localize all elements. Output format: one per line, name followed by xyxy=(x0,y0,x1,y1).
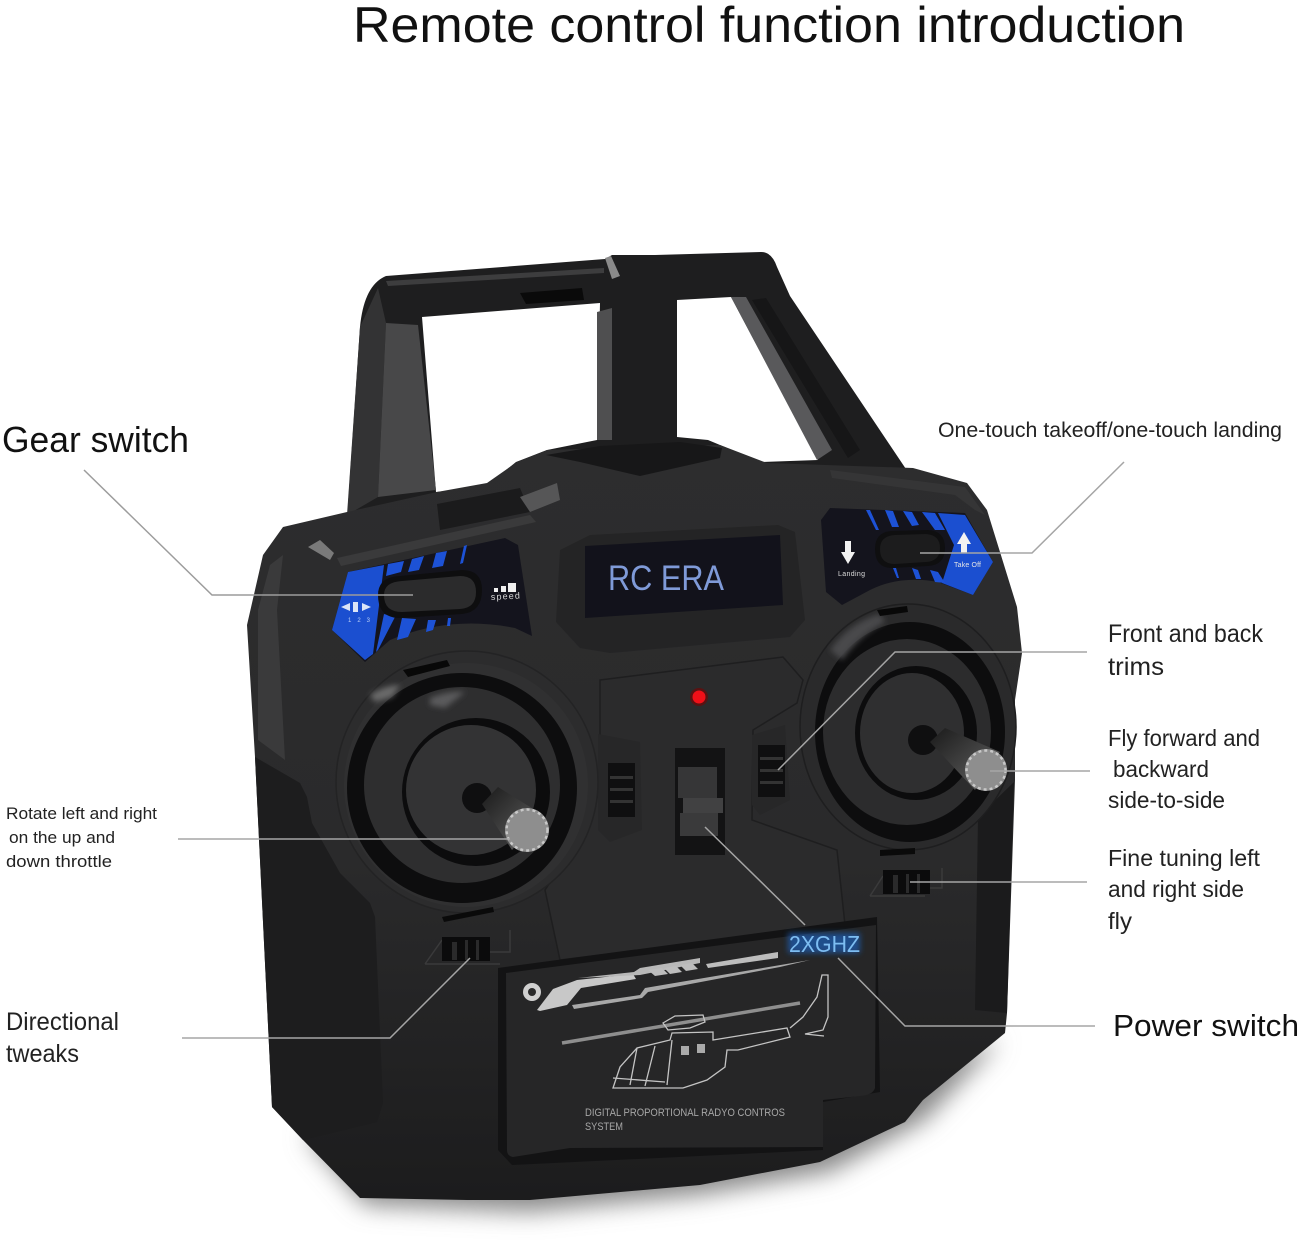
label: directional tweaks: tweaks xyxy=(6,1040,79,1068)
label: fine tuning xyxy=(1108,845,1261,934)
line: trims xyxy=(778,652,1087,770)
label: front and back trims: Front and back xyxy=(1108,620,1263,648)
right joystick xyxy=(800,604,1016,856)
ground shadow xyxy=(305,1040,1000,1212)
line: directional xyxy=(182,958,470,1038)
red power LED xyxy=(690,688,708,706)
right trim slider xyxy=(752,725,790,815)
left blue speed panel: 1 2 3 xyxy=(348,618,371,624)
left blue speed panel: speed xyxy=(491,590,520,602)
display screen xyxy=(556,525,805,653)
line: fly forward xyxy=(990,770,1090,772)
stick base xyxy=(908,725,938,755)
battery logo xyxy=(523,952,810,1011)
label: rotate throttle: Rotate left and right xyxy=(6,804,157,823)
label: power switch: Power switch xyxy=(1113,1008,1299,1043)
icon: gear indicators xyxy=(341,602,371,612)
stick base xyxy=(462,783,492,813)
shoulder facets xyxy=(308,470,985,566)
right blue takeoff panel: Landing xyxy=(838,571,865,578)
cover text: DIGITAL PROPORTIONAL RADYO CONTROS xyxy=(585,1107,785,1119)
line: fine tuning xyxy=(910,881,1087,883)
lower left trim xyxy=(425,930,510,964)
remote controller xyxy=(247,252,1022,1212)
left trim slider xyxy=(598,734,642,842)
left grip xyxy=(255,757,383,1140)
label: directional tweaks: Directional xyxy=(6,1008,119,1036)
right grip xyxy=(975,782,1014,1013)
cover text: SYSTEM xyxy=(585,1121,623,1133)
display text: RC ERA xyxy=(608,559,725,598)
stick knob xyxy=(505,808,549,852)
left joystick xyxy=(336,651,598,922)
label: rotate throttle xyxy=(6,804,157,871)
label: fly forward: side-to-side xyxy=(1108,787,1225,813)
label: rotate throttle: on the up and xyxy=(9,828,115,847)
frequency label: 2XGHZ xyxy=(789,931,860,957)
label: fine tuning: fly xyxy=(1108,908,1133,934)
line: gear switch xyxy=(84,470,413,595)
main body xyxy=(247,445,1022,1200)
battery cover xyxy=(498,917,880,1165)
helicopter line drawing xyxy=(562,975,828,1088)
handle clip xyxy=(546,442,722,476)
left blue speed panel xyxy=(332,538,532,662)
label: front and back trims xyxy=(1108,620,1263,681)
centre power switch xyxy=(675,748,725,855)
label: fly forward: Fly forward and xyxy=(1108,725,1260,751)
line: power switch xyxy=(705,827,1095,1026)
label: fly forward xyxy=(1108,725,1260,813)
label: fine tuning: Fine tuning left xyxy=(1108,845,1261,871)
carry handle xyxy=(340,252,916,530)
line: throttle xyxy=(178,838,510,840)
icon: speed bars xyxy=(494,583,516,592)
label: front and back trims: trims xyxy=(1108,653,1164,681)
label: fly forward: backward xyxy=(1113,756,1209,782)
label: fine tuning: and right side xyxy=(1108,876,1244,902)
line: one-touch xyxy=(920,462,1124,553)
right blue takeoff panel: Take Off xyxy=(954,562,981,569)
stick knob xyxy=(965,749,1007,791)
icon: takeoff arrow xyxy=(957,532,971,553)
left edge band xyxy=(258,555,285,760)
lower right trim xyxy=(870,868,942,896)
leader lines xyxy=(84,462,1124,1038)
label: rotate throttle: down throttle xyxy=(6,852,112,871)
icon: landing arrow xyxy=(841,541,855,564)
right blue takeoff panel xyxy=(821,508,993,605)
stick shaft xyxy=(482,787,543,850)
label: directional tweaks xyxy=(6,1008,119,1068)
cover text xyxy=(585,1107,785,1133)
centre face plate xyxy=(545,657,845,960)
stick shaft xyxy=(930,728,1000,790)
label: gear switch: Gear switch xyxy=(2,419,189,460)
label: one-touch: One-touch takeoff/one-touch landing xyxy=(938,419,1282,442)
